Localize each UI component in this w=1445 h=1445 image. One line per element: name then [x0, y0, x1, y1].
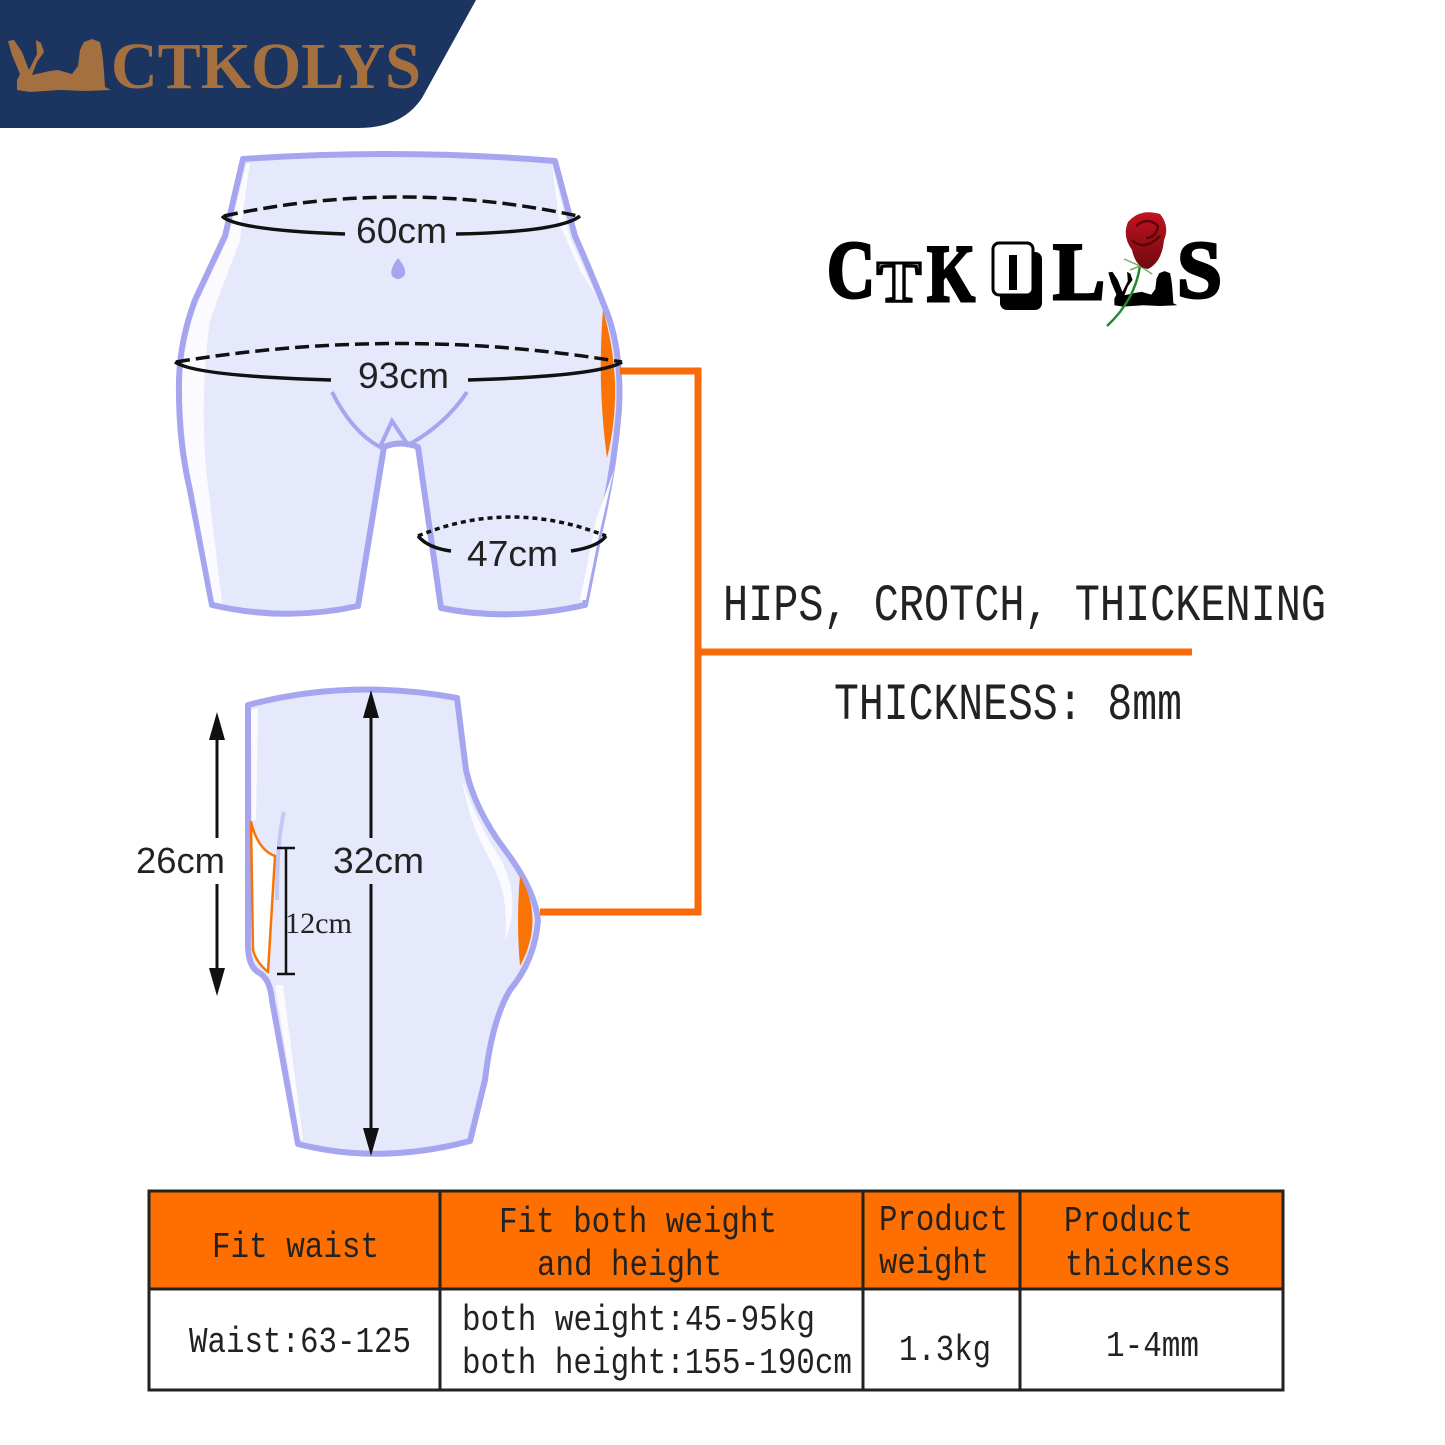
32cm arrow: [333, 690, 424, 1156]
thigh measure: 47cm: [467, 533, 558, 574]
hip measure: [175, 344, 622, 396]
rose brand logo: L: [1053, 226, 1105, 317]
front view diagram: [175, 154, 622, 614]
rose brand logo: S: [1177, 224, 1222, 315]
column: weight and height: both weight:45-95kg: [462, 1300, 815, 1341]
garment outline: side: [248, 689, 538, 1154]
navel mark: [391, 258, 405, 279]
hip measure: 93cm: [358, 355, 449, 396]
orange connector lines: [540, 371, 1192, 912]
garment outline: front: [179, 154, 619, 614]
column: weight and height: Fit both weight: [499, 1202, 777, 1243]
column: product thickness: [1064, 1201, 1231, 1367]
column: product thickness: 1-4mm: [1106, 1326, 1199, 1367]
thickened hip area: [601, 310, 615, 458]
column: fit waist: Fit waist: [212, 1227, 379, 1268]
thickened front area: [251, 822, 275, 972]
column: weight and height: both height:155-190cm: [462, 1343, 852, 1384]
side highlights: [251, 708, 512, 1140]
brand name: CTKOLYS: [111, 30, 421, 103]
rose brand logo: K: [927, 228, 975, 319]
rose brand logo: C: [827, 224, 875, 315]
waist measure: [222, 197, 580, 251]
column: fit waist: Waist:63-125: [189, 1322, 411, 1363]
column: product thickness: thickness: [1065, 1245, 1231, 1286]
column: product weight: [879, 1200, 1008, 1371]
icon: boxed letter: [993, 243, 1042, 310]
table grid: [149, 1191, 1283, 1390]
side highlights: [182, 163, 614, 603]
waist measure: 60cm: [356, 210, 447, 251]
column: product thickness: Product: [1064, 1201, 1193, 1242]
icon: reclining silhouette: [1108, 271, 1177, 307]
32cm arrow: 32cm: [333, 840, 424, 881]
rose brand logo: T: [877, 249, 921, 314]
26cm arrow: [136, 712, 225, 996]
26cm arrow: 26cm: [136, 840, 225, 881]
fold shadow: [277, 812, 284, 900]
column: weight and height: [462, 1202, 852, 1384]
column: product weight: Product: [879, 1200, 1008, 1241]
thigh measure: [418, 517, 606, 574]
column: product weight: 1.3kg: [899, 1330, 991, 1371]
crotch seam: [332, 392, 467, 447]
icon: rose: [1107, 212, 1166, 326]
12cm bracket: 12cm: [285, 907, 352, 940]
12cm bracket: [277, 848, 352, 974]
column: product weight: weight: [879, 1243, 989, 1284]
brand banner: [0, 0, 476, 128]
column: fit waist: [189, 1227, 411, 1363]
specification table: [149, 1191, 1283, 1390]
column: weight and height: and height: [537, 1245, 722, 1286]
thickness value: THICKNESS: 8mm: [834, 676, 1182, 735]
side view diagram: [136, 689, 538, 1156]
table header fill: [149, 1192, 1283, 1289]
thickening callout: [723, 577, 1326, 735]
rose brand logo: [827, 212, 1222, 326]
icon: reclining figure logo: [8, 39, 111, 92]
thickened rear area: [518, 876, 532, 966]
